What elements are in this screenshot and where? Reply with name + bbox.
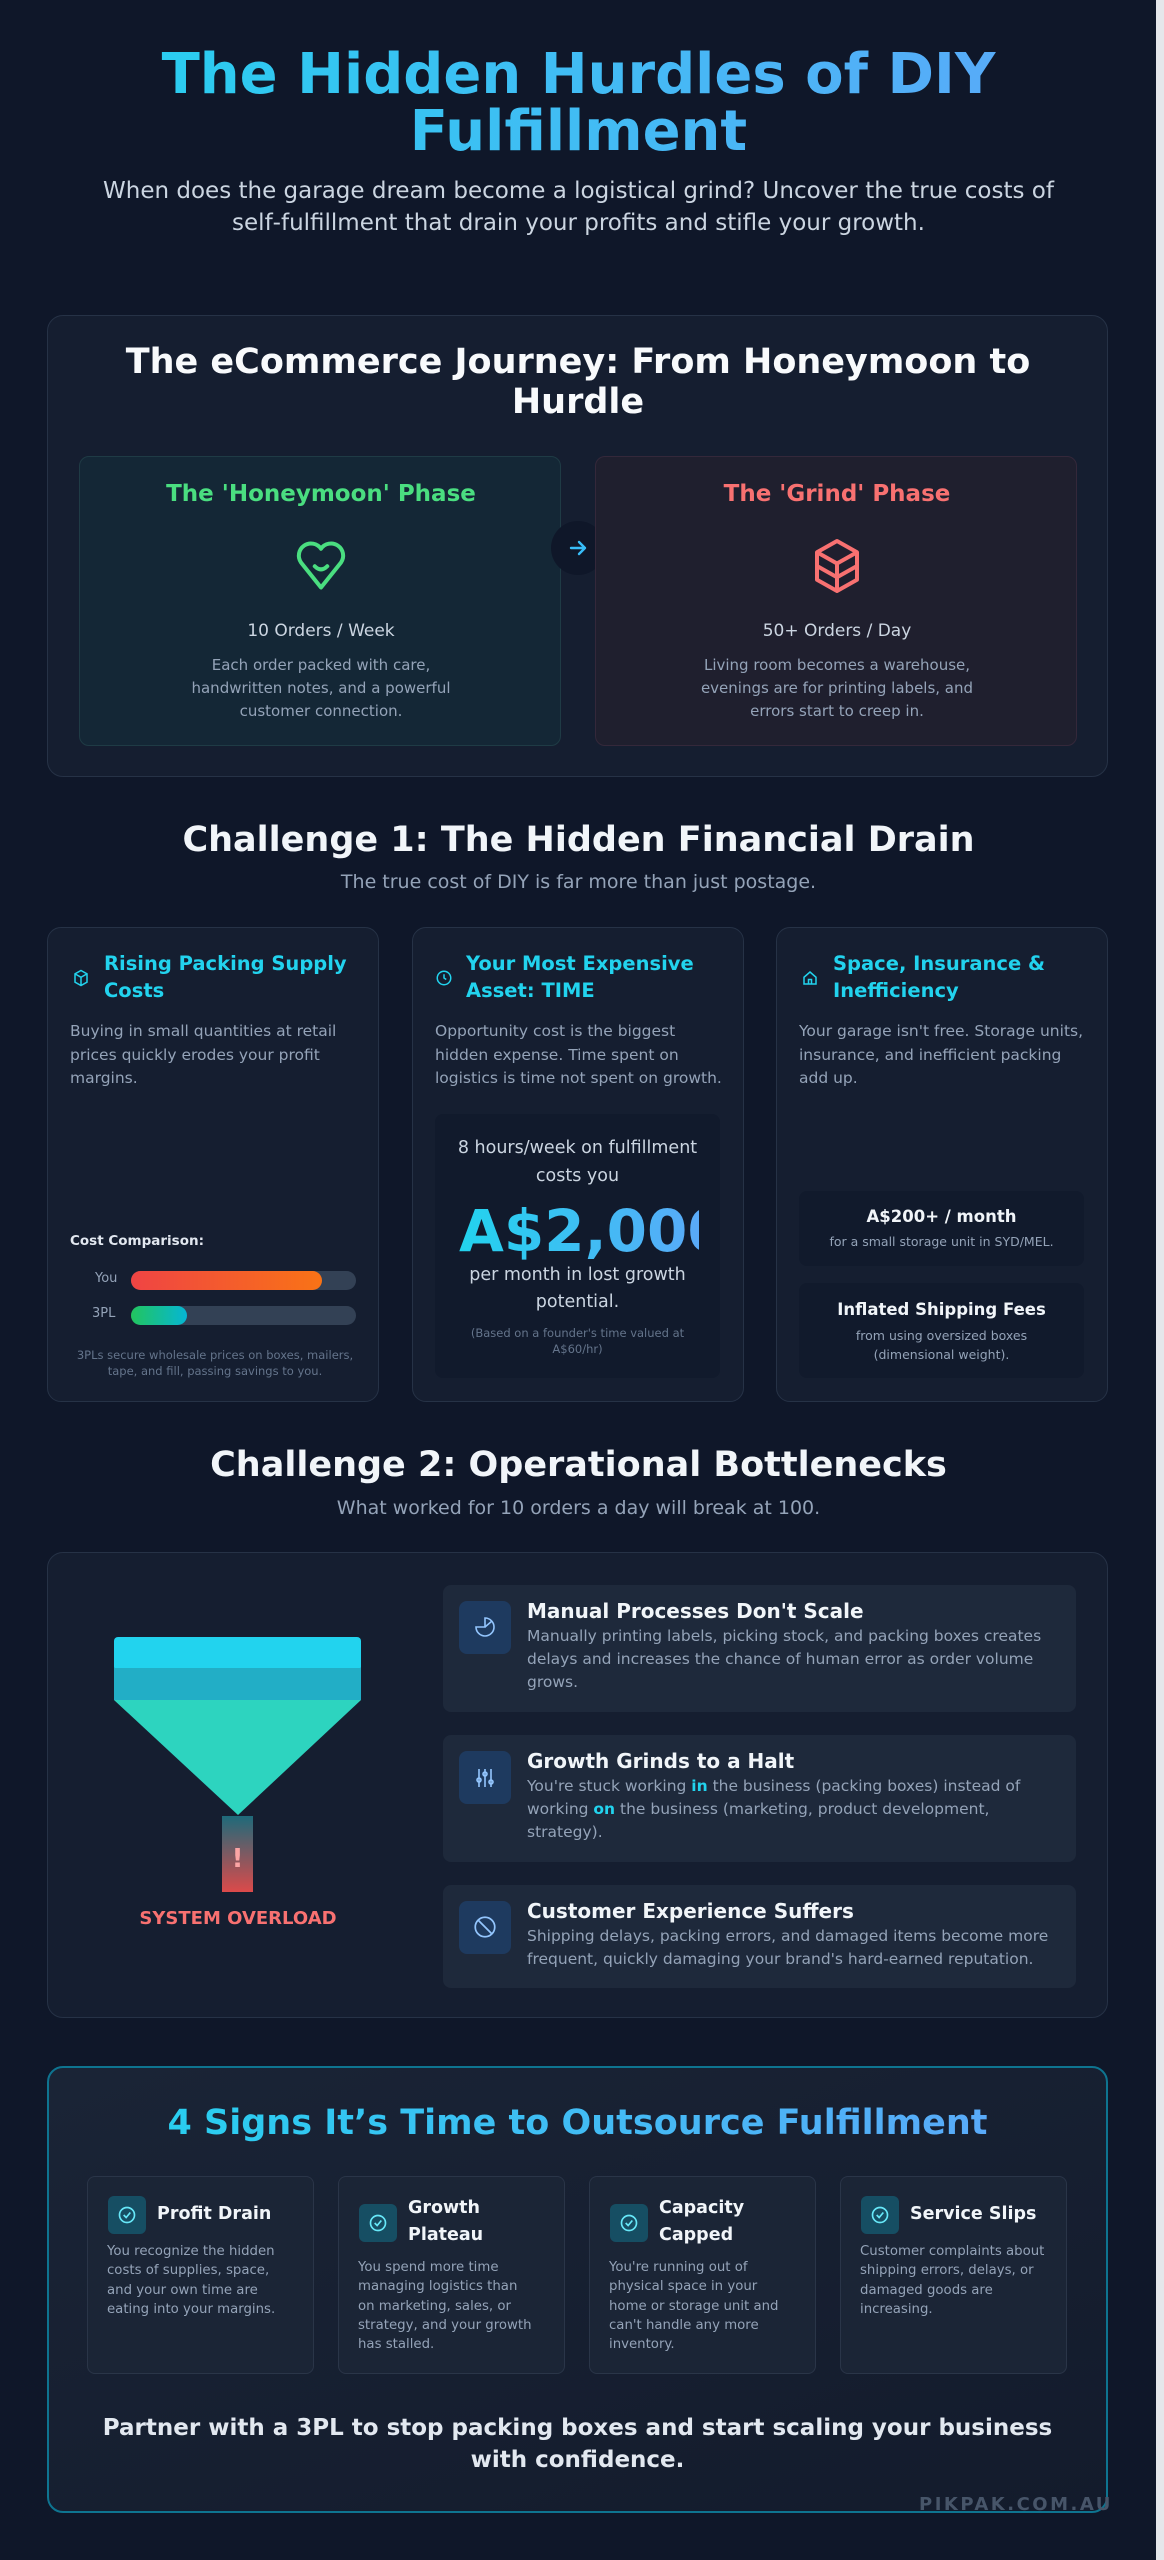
title: Rising Packing Supply Costs [104, 952, 347, 1002]
sign: capacity capped [589, 2176, 816, 2374]
subtitle: When does the garage dream become a logistical grind? Uncover the true costs of self‑fulfillment that drain your profits and stifle your growth. [103, 178, 1054, 236]
body: Your garage isn't free. Storage units, insurance, and inefficient packing add up. [799, 1022, 1083, 1087]
card: space [776, 927, 1108, 1402]
box: storage [799, 1191, 1084, 1266]
callout: A$2,000: per month in lost growth potential. [469, 1265, 686, 1312]
cost comparison chart: 3PL [92, 1306, 115, 1321]
icon: heart [296, 542, 346, 590]
sign: growth plateau: Growth [408, 2198, 480, 2218]
sign: capacity capped: You're running out of physical space in your home or storage unit and can't handle any more inventory. [609, 2260, 778, 2352]
funnel graphic: ! [232, 1844, 243, 1874]
card: honeymoon [79, 456, 561, 746]
body: Buying in small quantities at retail prices quickly erodes your profit margins. [70, 1022, 336, 1087]
signs heading: 4 Signs It’s Time to Outsource Fulfillment [167, 2103, 988, 2143]
funnel graphic [114, 1637, 361, 1892]
box: shipping: from using oversized boxes (dimensional weight). [856, 1328, 1027, 1362]
honeymoon orders: 10 Orders / Week [247, 621, 395, 641]
sign: profit drain: Profit Drain [157, 2204, 271, 2224]
callout: A$2,000: (Based on a founder's time valued at A$60/hr) [471, 1326, 684, 1356]
call to action: Partner with a 3PL to stop packing boxes and start scaling your business with confidence. [103, 2415, 1052, 2473]
grind orders: 50+ Orders / Day [763, 621, 911, 641]
scrollbar strip [1156, 0, 1164, 2560]
callout: A$2,000 [435, 1114, 720, 1378]
item: growth halt: You're stuck working in the business (packing boxes) instead of working on the business (marketing, product development, strategy). [527, 1777, 1020, 1841]
box: storage: for a small storage unit in SYD/MEL. [829, 1234, 1054, 1249]
icon: clock [436, 970, 452, 986]
label: system overload: SYSTEM OVERLOAD [139, 1908, 337, 1929]
subheading: challenge 1: The true cost of DIY is far more than just postage. [341, 871, 816, 893]
callout: A$2,000: 8 hours/week on fulfillment costs you [458, 1138, 697, 1186]
cost comparison chart: 3PLs secure wholesale prices on boxes, mailers, tape, and fill, passing savings to you. [77, 1348, 353, 1378]
icon: cube [74, 970, 88, 986]
box: storage: A$200+ / month [867, 1207, 1016, 1226]
heading: challenge 2: Challenge 2: Operational Bottlenecks [210, 1445, 947, 1485]
icon: box [815, 539, 859, 593]
journey heading: The eCommerce Journey: From Honeymoon to Hurdle [126, 342, 1030, 422]
grind title: The 'Grind' Phase [724, 481, 950, 507]
cost comparison chart: Cost Comparison: [70, 1233, 204, 1249]
honeymoon title: The 'Honeymoon' Phase [166, 481, 476, 507]
grind desc: Living room becomes a warehouse, evenings are for printing labels, and errors start to creep in. [701, 656, 973, 720]
title: Fulfillment [410, 99, 747, 164]
body: Opportunity cost is the biggest hidden expense. Time spent on logistics is time not spent on growth. [435, 1022, 722, 1087]
item: manual processes: Manual Processes Don't Scale [527, 1599, 864, 1623]
sign: service slips: Service Slips [910, 2204, 1036, 2224]
sign: growth plateau [338, 2176, 565, 2374]
title: Your Most Expensive Asset: TIME [466, 952, 694, 1002]
item: customer experience [443, 1885, 1076, 1988]
box: shipping [799, 1283, 1084, 1378]
footer brand: PIKPAK.COM.AU [919, 2494, 1113, 2515]
arrow [551, 521, 605, 575]
sign: profit drain [87, 2176, 314, 2374]
title: Space, Insurance & Inefficiency [833, 952, 1045, 1002]
item: manual processes [443, 1585, 1076, 1712]
card: packing supply [47, 927, 379, 1402]
icon: ban [459, 1901, 511, 1954]
sign: growth plateau: You spend more time managing logistics than on marketing, sales, or strategy, and your growth has stalled. [358, 2260, 532, 2352]
honeymoon desc: Each order packed with care, handwritten notes, and a powerful customer connection. [191, 656, 450, 720]
cost comparison chart: You [95, 1271, 117, 1286]
subheading: challenge 2: What worked for 10 orders a day will break at 100. [337, 1497, 820, 1519]
sign: capacity capped: Capped [659, 2225, 733, 2245]
item: growth halt [443, 1735, 1076, 1862]
panel: journey [47, 315, 1108, 777]
card: time [412, 927, 744, 1402]
item: customer experience: Shipping delays, packing errors, and damaged items become more frequent, quickly damaging your brand's hard-earned reputation. [527, 1927, 1048, 1968]
icon: sliders [459, 1751, 511, 1804]
item: growth halt: Growth Grinds to a Halt [527, 1749, 794, 1773]
card: grind [595, 456, 1077, 746]
sign: service slips: Customer complaints about shipping errors, delays, or damaged goods are increasing. [860, 2244, 1044, 2317]
sign: profit drain: You recognize the hidden costs of supplies, space, and your own time are eating into your margins. [107, 2244, 275, 2317]
item: manual processes: Manually printing labels, picking stock, and packing boxes creates delays and increases the chance of human error as order volume grows. [527, 1627, 1041, 1691]
icon: house [803, 971, 817, 985]
heading: challenge 1: Challenge 1: The Hidden Financial Drain [182, 820, 975, 860]
box: shipping: Inflated Shipping Fees [837, 1300, 1046, 1319]
sign: capacity capped: Capacity [659, 2198, 744, 2218]
sign: service slips [840, 2176, 1067, 2374]
title: The Hidden Hurdles of DIY [162, 42, 995, 107]
title [0, 46, 1157, 160]
sign: growth plateau: Plateau [408, 2225, 483, 2245]
icon: pie [459, 1601, 511, 1654]
item: customer experience: Customer Experience Suffers [527, 1899, 854, 1923]
panel: bottlenecks [47, 1552, 1108, 2018]
panel: 4 signs [47, 2066, 1108, 2513]
cost comparison chart [70, 1233, 356, 1378]
